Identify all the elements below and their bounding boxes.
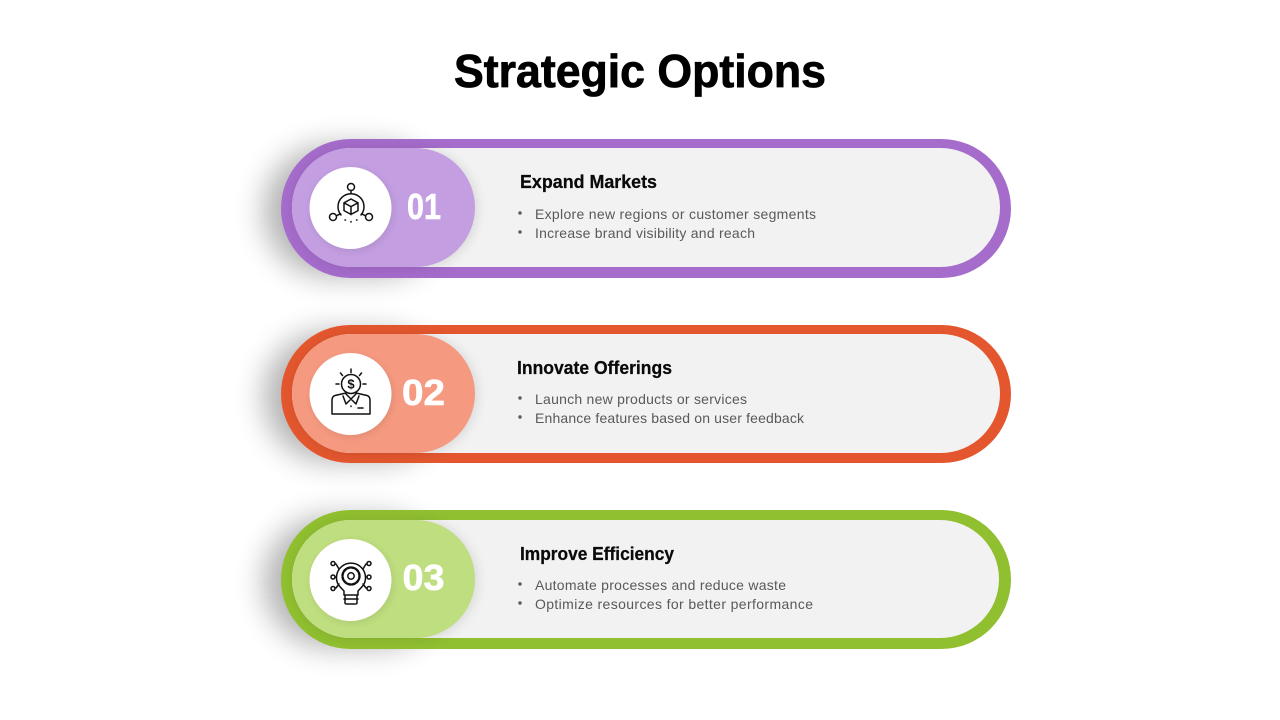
bullet list xyxy=(518,206,816,241)
icon: network cube xyxy=(330,184,372,222)
panel shadow xyxy=(264,517,444,647)
number tab shadow xyxy=(294,335,477,454)
heading: Innovate Offerings xyxy=(517,358,672,378)
bullet list: Enhance features based on user feedback xyxy=(535,410,805,426)
number tab shadow xyxy=(294,149,477,268)
title: Strategic Options xyxy=(454,45,826,97)
number tab xyxy=(292,334,475,453)
panel: improve efficiency xyxy=(264,510,1011,649)
inner panel xyxy=(292,520,999,638)
icon: idea person: $ xyxy=(347,376,355,392)
bullet list: Optimize resources for better performance xyxy=(535,596,813,612)
number 02: 02 xyxy=(402,372,445,413)
icon circle xyxy=(310,167,393,251)
number tab xyxy=(292,148,475,267)
panel: expand markets xyxy=(264,139,1011,278)
number tab xyxy=(292,520,475,638)
number 03: 03 xyxy=(402,557,444,598)
inner panel xyxy=(292,334,1000,453)
icon circle xyxy=(310,353,393,437)
number 01: 01 xyxy=(407,186,441,227)
heading: Expand Markets xyxy=(520,172,657,192)
bullet list xyxy=(518,391,805,426)
bullet list: Explore new regions or customer segments xyxy=(535,206,816,222)
outer ring xyxy=(281,510,1011,649)
outer ring xyxy=(281,325,1011,463)
panel: innovate offerings xyxy=(264,325,1011,463)
bullet list: Launch new products or services xyxy=(535,391,747,407)
bullet list: Automate processes and reduce waste xyxy=(535,577,786,593)
icon: gear bulb xyxy=(331,562,371,604)
icon circle xyxy=(310,539,393,623)
icon: idea person xyxy=(332,369,370,414)
inner panel xyxy=(292,148,1000,267)
number tab shadow xyxy=(294,521,477,639)
heading: Improve Efficiency xyxy=(520,544,674,564)
outer ring xyxy=(281,139,1011,278)
panel shadow xyxy=(264,146,444,276)
bullet list: Increase brand visibility and reach xyxy=(535,225,755,241)
panel shadow xyxy=(264,332,444,461)
bullet list xyxy=(518,577,813,612)
